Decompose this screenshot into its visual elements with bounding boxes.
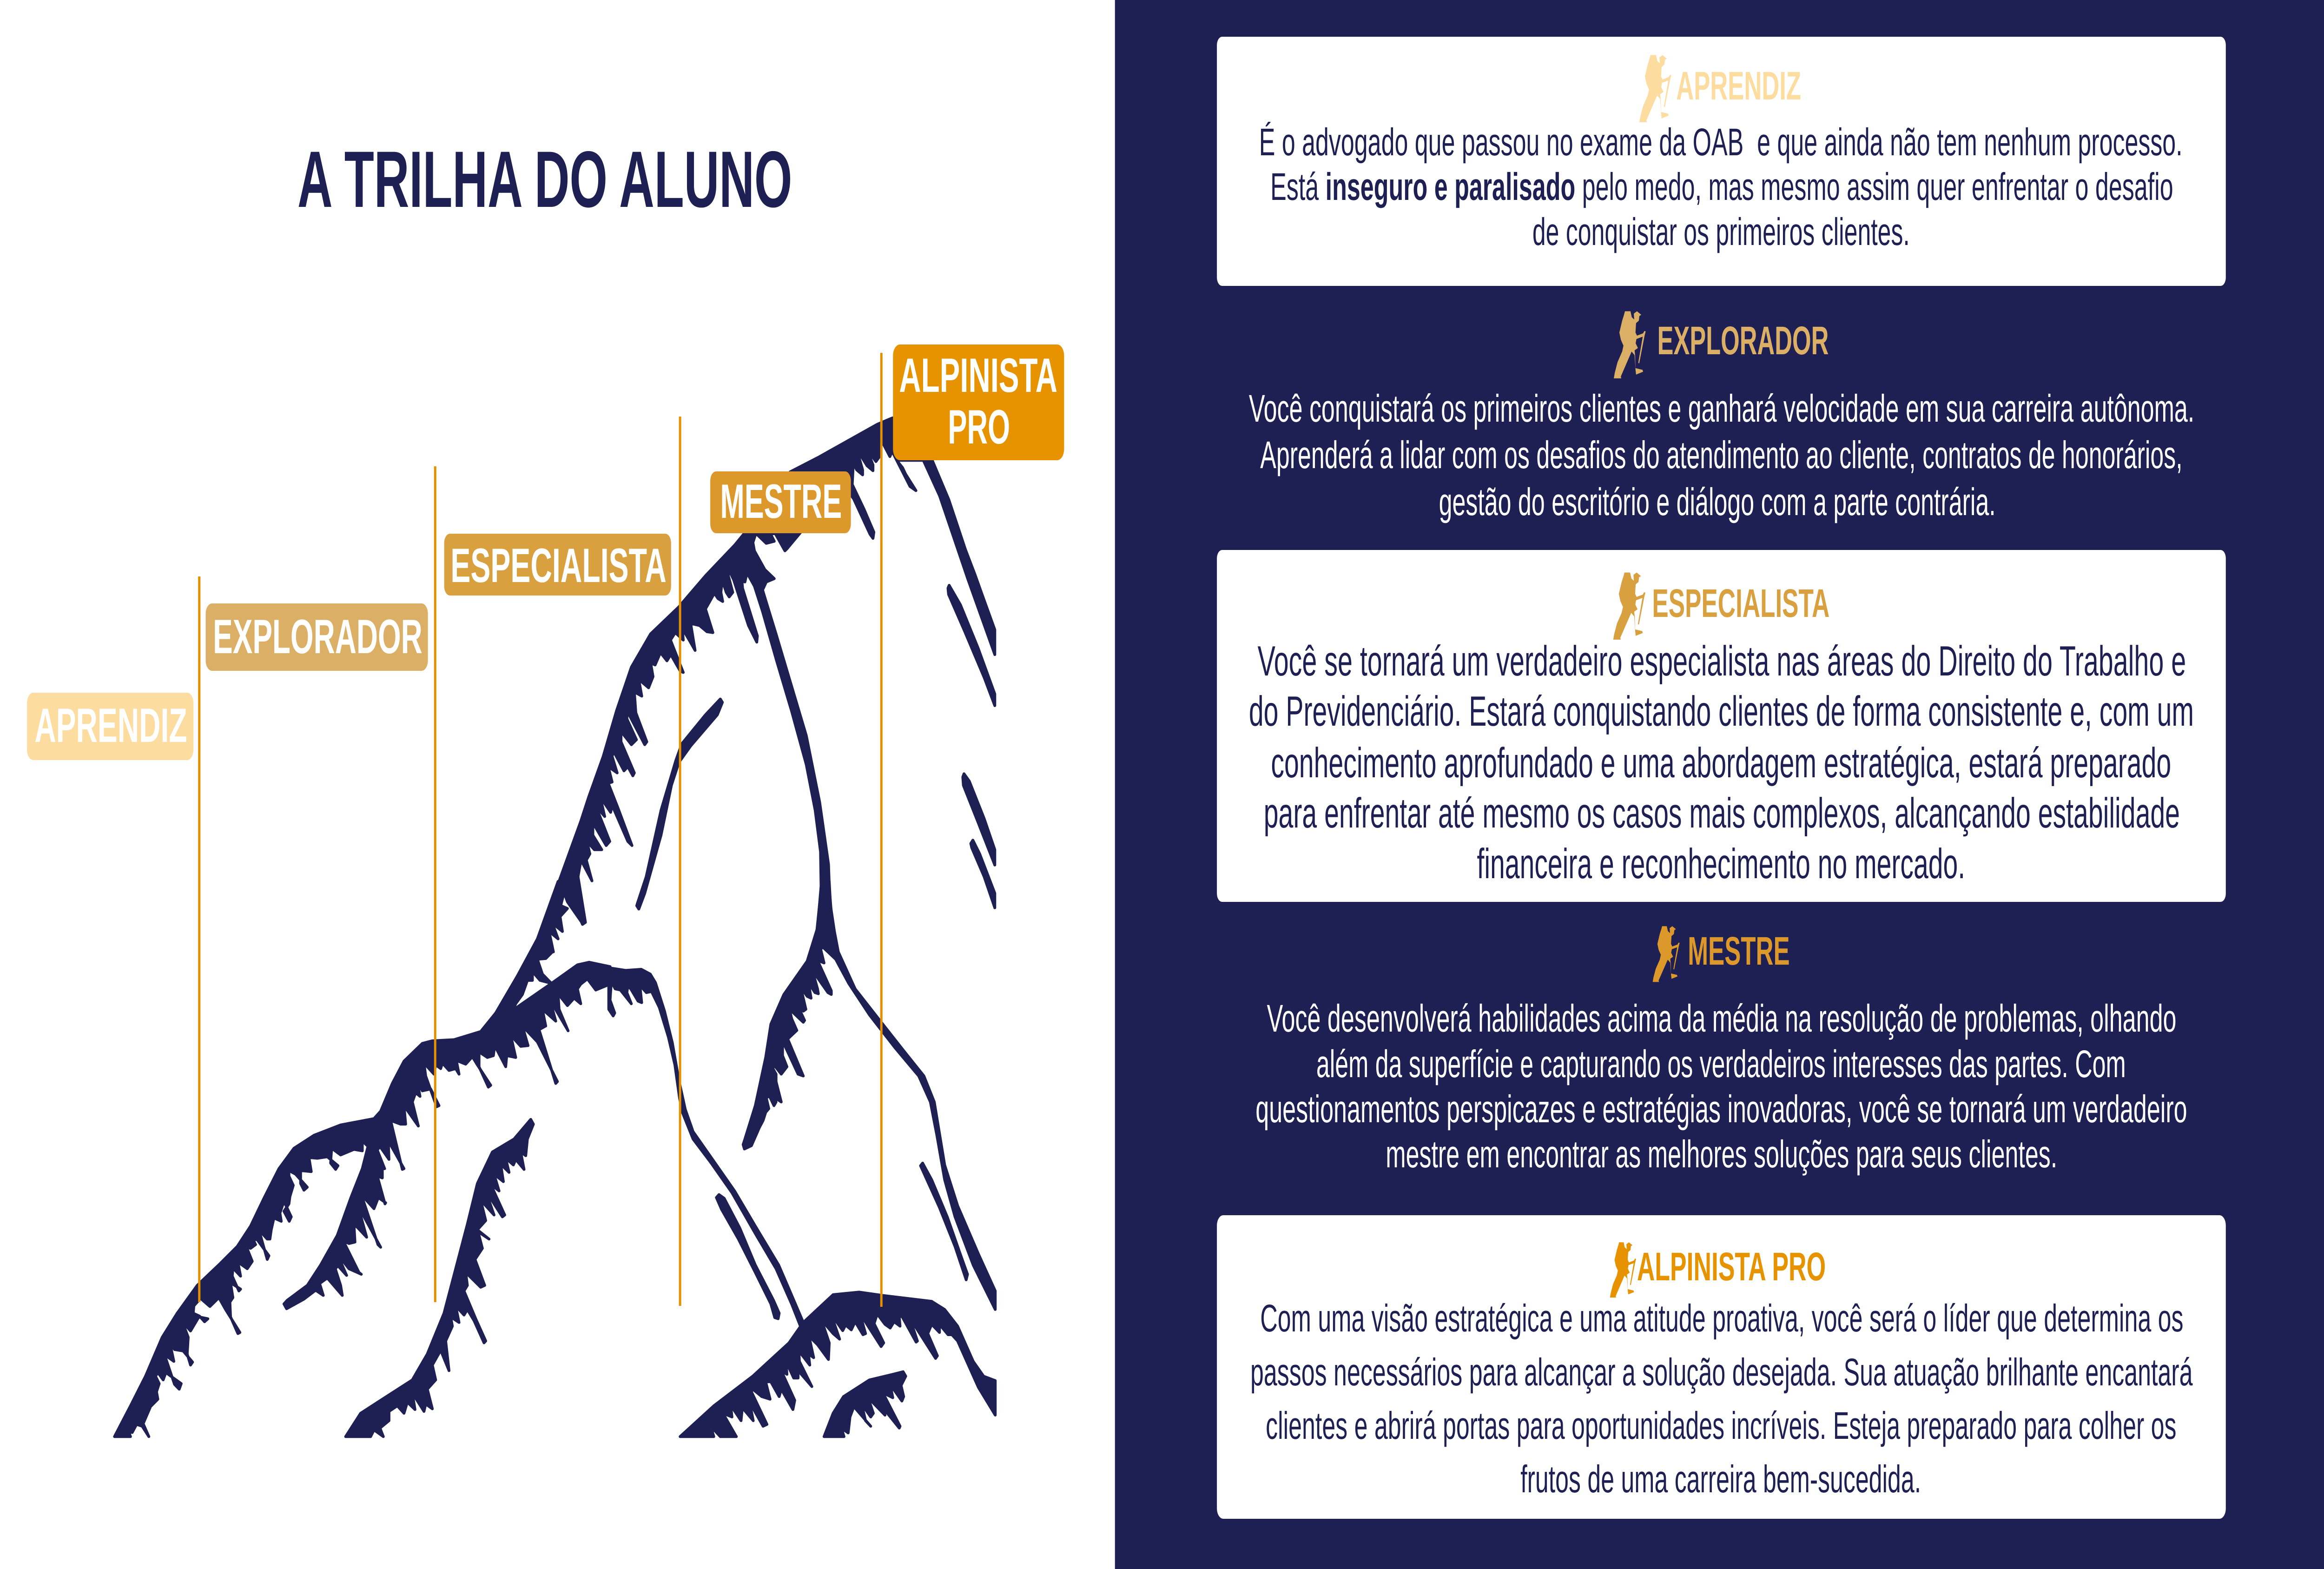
text block ESPECIALISTA: para enfrentar até mesmo os casos mais complexos, alcançando estabilidade [1264, 790, 2180, 837]
text block ESPECIALISTA: conhecimento aprofundado e uma abordagem estratégica, estará preparado [1271, 740, 2171, 787]
heading ESPECIALISTA: ESPECIALISTA [1652, 581, 1829, 626]
text block APRENDIZ: de conquistar os primeiros clientes. [1532, 210, 1910, 253]
text block ALPINISTA PRO: passos necessários para alcançar a solução desejada. Sua atuação brilhante encantará [1250, 1351, 2193, 1394]
heading MESTRE: MESTRE [1688, 929, 1790, 973]
chart: mountain illustration [114, 412, 995, 1437]
label: APRENDIZ: APRENDIZ [34, 699, 187, 753]
label: ALPINISTA PRO: PRO [948, 400, 1010, 454]
text block ESPECIALISTA: financeira e reconhecimento no mercado. [1477, 841, 1965, 887]
panel: card ALPINISTA PRO [1217, 1215, 2226, 1519]
text block EXPLORADOR: gestão do escritório e diálogo com a parte contrária. [1439, 480, 1996, 523]
heading APRENDIZ: APRENDIZ [1676, 64, 1801, 108]
icon: hiker MESTRE [1653, 926, 1680, 982]
panel: card ESPECIALISTA [1217, 550, 2226, 902]
text block ESPECIALISTA: Você se tornará um verdadeiro especialista nas áreas do Direito do Trabalho e [1258, 638, 2186, 685]
icon: hiker ESPECIALISTA [1613, 573, 1645, 640]
label: ESPECIALISTA: ESPECIALISTA [450, 539, 667, 593]
icon: hiker APRENDIZ [1639, 55, 1671, 122]
text block EXPLORADOR [1249, 387, 2194, 523]
text block ALPINISTA PRO: clientes e abrirá portas para oportunidades incríveis. Esteja preparado para colher os [1266, 1404, 2176, 1447]
label: MESTRE: MESTRE [720, 475, 842, 529]
text block APRENDIZ: Está inseguro e paralisado pelo medo, mas mesmo assim quer enfrentar o desafio [1270, 165, 2173, 208]
icon: hiker EXPLORADOR [1614, 311, 1646, 378]
text block APRENDIZ [1259, 120, 2183, 253]
label: ALPINISTA PRO [893, 344, 1064, 460]
text block MESTRE: além da superfície e capturando os verdadeiros interesses das partes. Com [1316, 1042, 2126, 1086]
panel: right navy background [1115, 0, 2324, 1569]
text block EXPLORADOR: Aprenderá a lidar com os desafios do atendimento ao cliente, contratos de honorários, [1260, 433, 2183, 477]
text block APRENDIZ: É o advogado que passou no exame da OAB e que ainda não tem nenhum processo. [1259, 120, 2183, 164]
panel: card APRENDIZ [1217, 37, 2226, 286]
label: ALPINISTA PRO: ALPINISTA [899, 349, 1057, 403]
text block ALPINISTA PRO: frutos de uma carreira bem-sucedida. [1520, 1457, 1921, 1501]
text block ESPECIALISTA: do Previdenciário. Estará conquistando clientes de forma consistente e, com um [1249, 688, 2194, 735]
panel: section MESTRE [1255, 926, 2187, 1176]
text block ESPECIALISTA [1249, 638, 2194, 887]
text block ALPINISTA PRO: Com uma visão estratégica e uma atitude proativa, você será o líder que determina os [1260, 1297, 2184, 1340]
text block EXPLORADOR: Você conquistará os primeiros clientes e ganhará velocidade em sua carreira autônoma. [1249, 387, 2194, 430]
heading EXPLORADOR: EXPLORADOR [1657, 318, 1829, 363]
icon: hiker ALPINISTA PRO [1610, 1242, 1636, 1298]
title: A TRILHA DO ALUNO [297, 135, 792, 224]
heading ALPINISTA PRO: ALPINISTA PRO [1637, 1245, 1826, 1289]
text block MESTRE: mestre em encontrar as melhores soluções para seus clientes. [1386, 1132, 2057, 1176]
text block MESTRE: Você desenvolverá habilidades acima da média na resolução de problemas, olhando [1267, 997, 2176, 1040]
panel: section EXPLORADOR [1249, 311, 2194, 523]
text block MESTRE [1255, 997, 2187, 1176]
text block ALPINISTA PRO [1250, 1297, 2193, 1501]
vertical orange stage markers [198, 353, 883, 1307]
text block MESTRE: questionamentos perspicazes e estratégias inovadoras, você se tornará um verdadeiro [1255, 1087, 2187, 1131]
label: EXPLORADOR: EXPLORADOR [213, 610, 423, 664]
